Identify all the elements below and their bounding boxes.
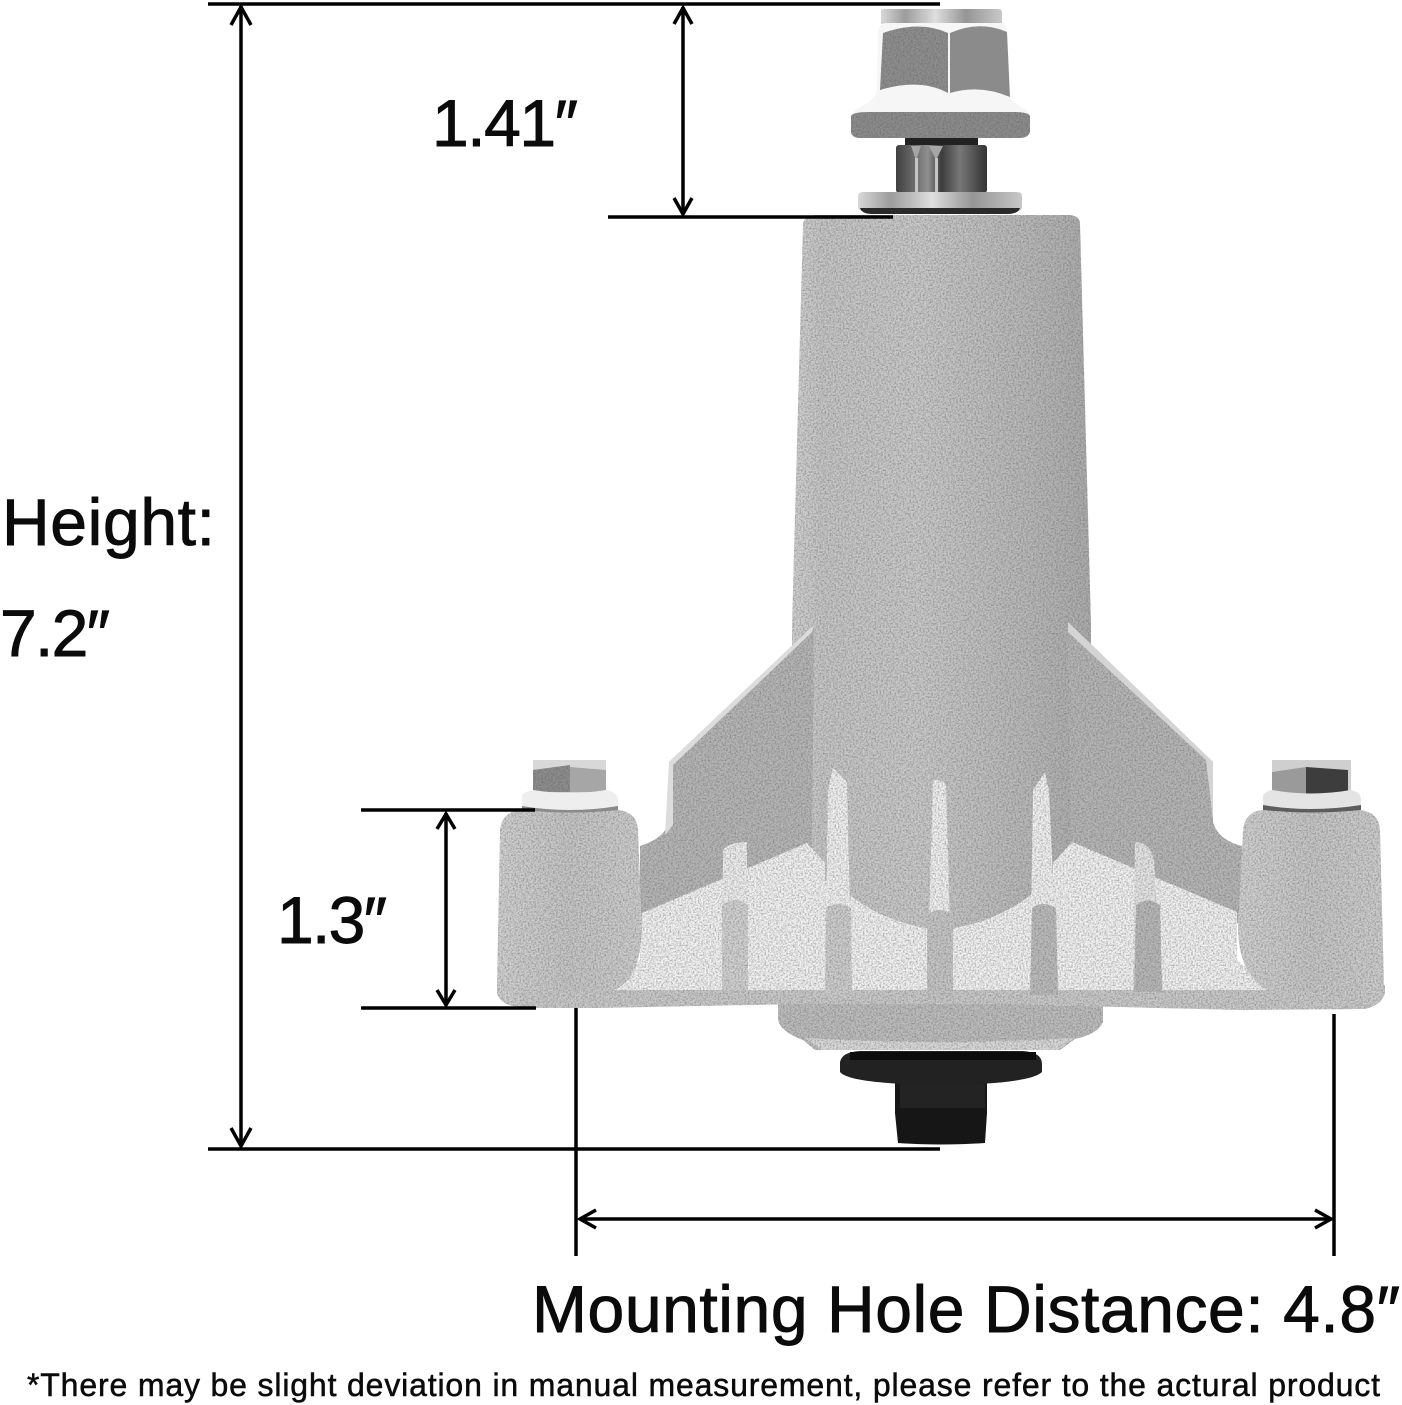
light flange surface — [600, 842, 1280, 995]
label: height: Height: — [2, 485, 215, 559]
product photo: blade spindle assembly — [497, 9, 1385, 1144]
base strip — [497, 985, 1385, 1010]
right gusset — [1068, 622, 1242, 925]
left mounting pod — [497, 810, 642, 1005]
label: 1.3 inch: 1.3″ — [277, 883, 387, 957]
label: 1.41 inch: 1.41″ — [432, 86, 578, 160]
left gusset edge highlight — [665, 625, 814, 835]
right gusset edge highlight — [1068, 622, 1213, 820]
top flange nut — [851, 9, 1030, 138]
footnote: *There may be slight deviation in manual measurement, please refer to the actural product — [27, 1367, 1380, 1403]
lower black nut and washer — [840, 1051, 1042, 1144]
lower bearing housing — [778, 1002, 1103, 1050]
main column — [792, 215, 1091, 960]
dimension: 1.3 inch pod height — [361, 810, 536, 1008]
splined shaft — [896, 138, 987, 193]
stiffening ribs — [722, 768, 1163, 1000]
shaft washer — [858, 192, 1022, 214]
label: mounting hole distance: Mounting Hole Distance: 4.8″ — [532, 1272, 1400, 1346]
right mounting pod — [1238, 810, 1384, 1005]
left bolt — [522, 760, 618, 812]
dimension: mounting hole distance — [576, 1008, 1334, 1256]
dimension lines — [208, 4, 1334, 1256]
left gusset — [640, 625, 814, 925]
right bolt — [1263, 760, 1361, 812]
label: 7.2 inch: 7.2″ — [0, 596, 110, 670]
dimension: 1.41 inch shaft height — [608, 7, 893, 217]
height dimension: overall — [208, 4, 940, 1149]
